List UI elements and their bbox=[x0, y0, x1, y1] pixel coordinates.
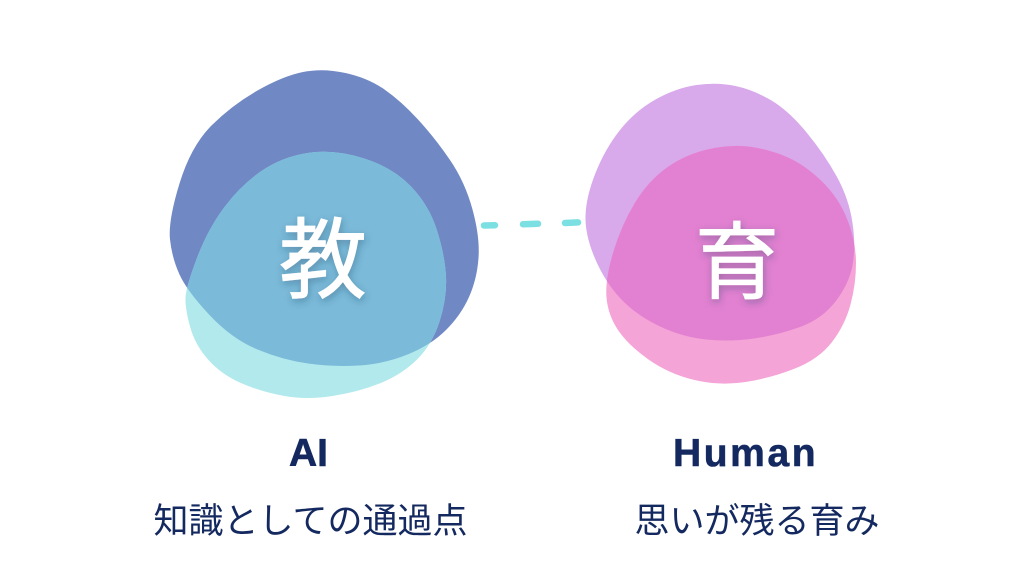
subtitle: AI: 知識としての通過点 bbox=[154, 502, 467, 541]
kanji: 教: 教 bbox=[279, 190, 367, 317]
blob group: Human 育 bbox=[585, 84, 856, 384]
kanji: 育: 育 bbox=[695, 196, 779, 317]
dashed connector bbox=[484, 222, 578, 226]
heading: AI: AI bbox=[289, 432, 328, 475]
heading: Human: Human bbox=[673, 432, 818, 475]
subtitle: Human: 思いが残る育み bbox=[634, 502, 880, 541]
blob group: AI 教 bbox=[170, 70, 479, 398]
